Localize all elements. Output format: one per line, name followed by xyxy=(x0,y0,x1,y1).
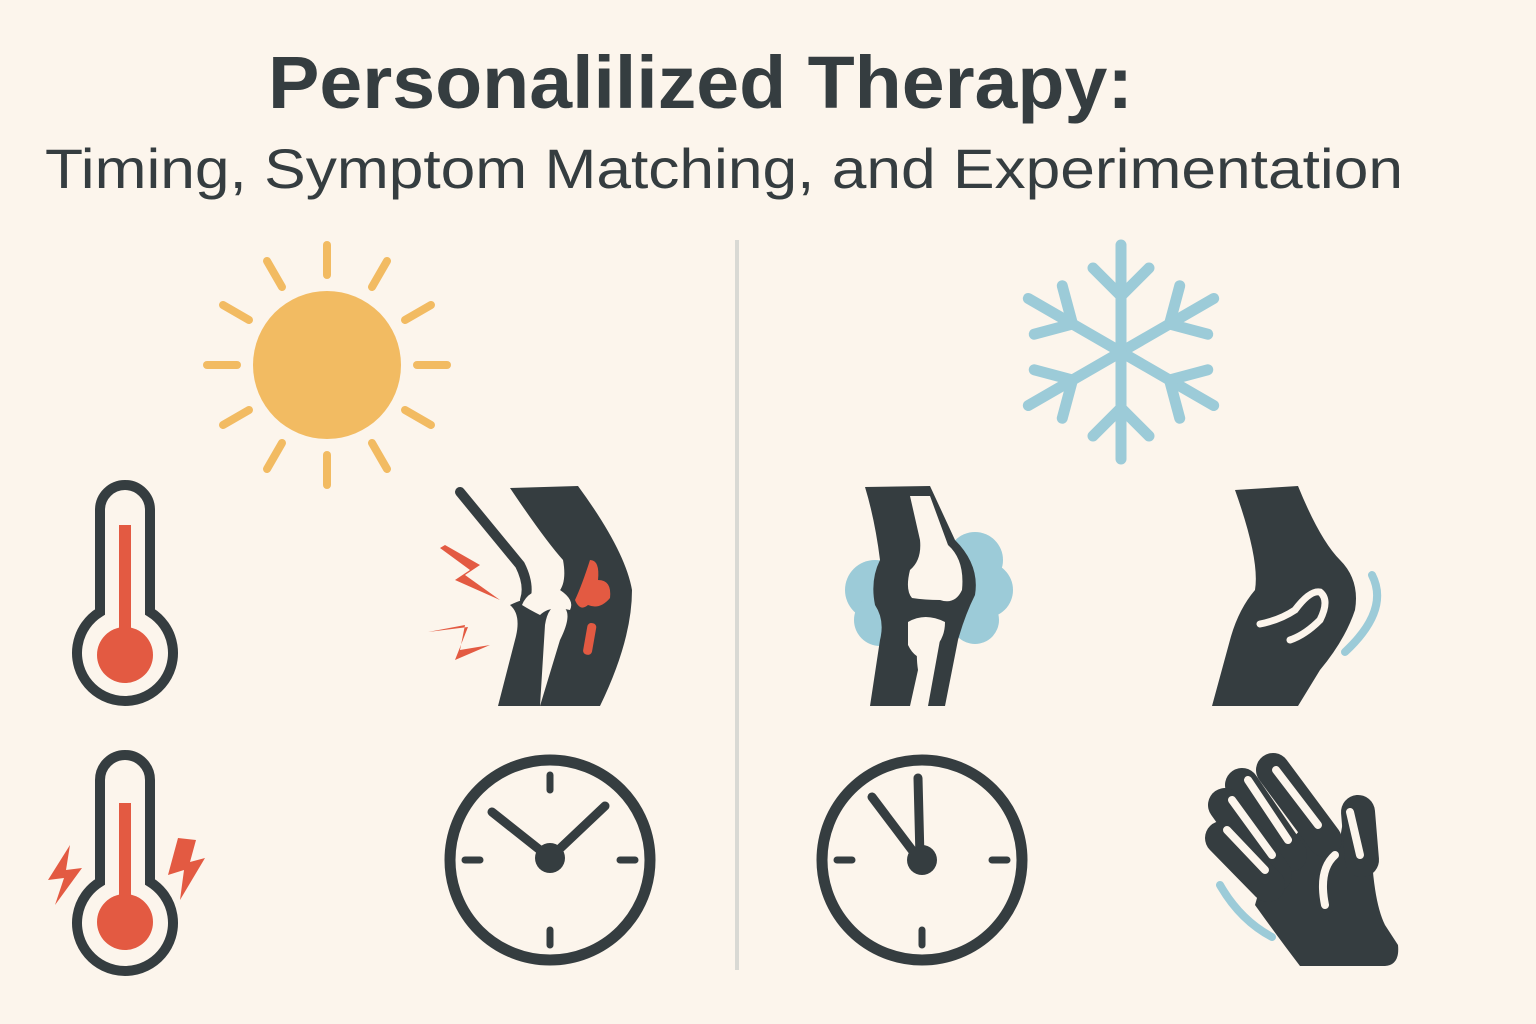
subtitle: Timing, Symptom Matching, and Experimentation xyxy=(45,137,1403,200)
icon: clock 2 xyxy=(822,760,1022,960)
icon: knee with pain xyxy=(428,486,632,706)
icon: snowflake xyxy=(1014,245,1228,459)
icon: swollen knee xyxy=(845,486,1013,706)
title: Personalilized Therapy: xyxy=(268,41,1133,124)
icon: sun xyxy=(207,245,447,485)
icon: thermometer xyxy=(77,485,173,701)
icon: hand xyxy=(1220,770,1398,966)
icon: clock 1 xyxy=(450,760,650,960)
icon: thermometer with pain xyxy=(48,755,205,971)
icon: knee with motion xyxy=(1212,486,1377,706)
